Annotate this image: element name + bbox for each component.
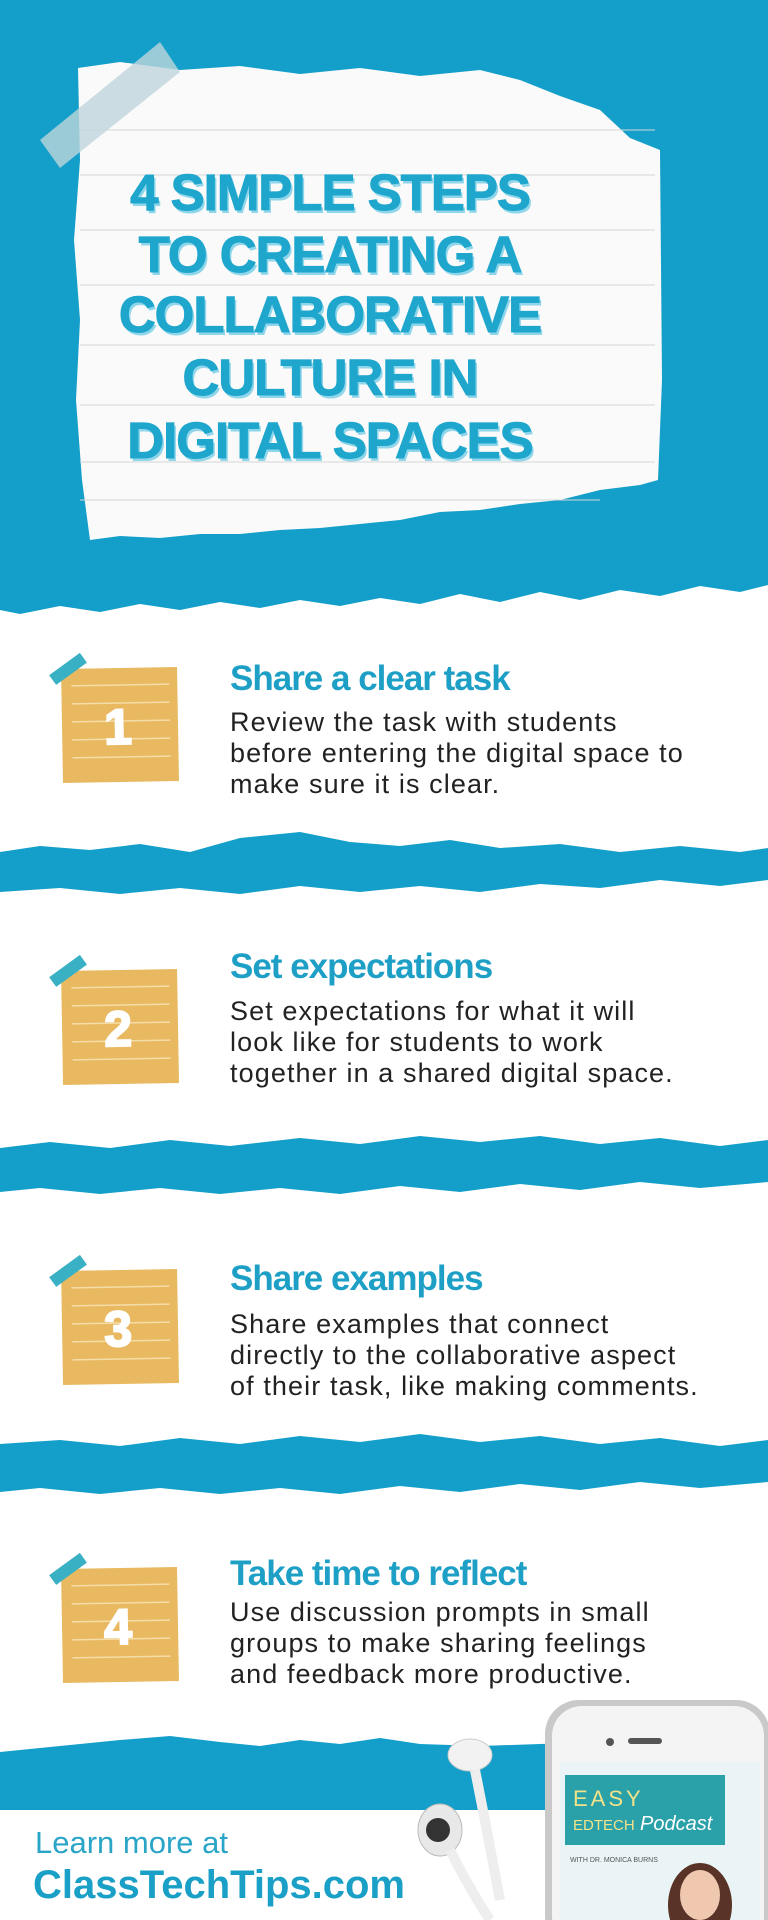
tape <box>40 42 180 168</box>
step 3 <box>49 1253 699 1401</box>
body 2 <box>230 996 674 1088</box>
step 4 <box>49 1551 650 1689</box>
body 4 <box>230 1597 650 1689</box>
heading 4: Take time to reflect <box>230 1554 528 1593</box>
note 4: 4 <box>104 1599 133 1655</box>
body 1: make sure it is clear. <box>230 769 500 799</box>
heading 1: Share a clear task <box>230 659 511 698</box>
title text: DIGITAL SPACES <box>129 415 535 472</box>
footer: learn more: ClassTechTips.com <box>33 1863 405 1907</box>
step 2 <box>49 947 674 1088</box>
heading 2: Set expectations <box>230 947 493 986</box>
strip 1 <box>0 832 768 894</box>
background: top blue torn <box>0 0 768 614</box>
title text: CULTURE IN <box>184 352 480 409</box>
body 3: directly to the collaborative aspect <box>230 1340 676 1370</box>
title text: TO CREATING A <box>139 226 522 283</box>
note 3: 3 <box>104 1301 132 1357</box>
body 3: of their task, like making comments. <box>230 1371 699 1401</box>
body 4: groups to make sharing feelings <box>230 1628 647 1658</box>
title text: 4 SIMPLE STEPS <box>130 164 530 221</box>
icon: phone with podcast: Podcast <box>640 1813 714 1835</box>
icon: phone with podcast: EDTECH <box>573 1817 635 1834</box>
title text: 4 SIMPLE STEPS <box>132 167 532 224</box>
body 4: and feedback more productive. <box>230 1659 633 1689</box>
note 3 <box>49 1253 179 1385</box>
icon: phone with podcast: WITH DR. MONICA BURNS <box>570 1857 658 1864</box>
note 2 <box>49 953 179 1085</box>
title text: DIGITAL SPACES <box>127 412 533 469</box>
step 1 <box>49 651 684 799</box>
strip 4 bottom blue <box>0 1736 768 1810</box>
strip 2 <box>0 1136 768 1194</box>
body 2: Set expectations for what it will <box>230 996 635 1026</box>
body 4: Use discussion prompts in small <box>230 1597 650 1627</box>
footer: learn more: Learn more at <box>35 1825 228 1860</box>
title text: TO CREATING A <box>141 229 524 286</box>
body 3 <box>230 1309 699 1401</box>
footer: learn more <box>33 1825 405 1907</box>
note 1 <box>49 651 179 783</box>
icon: earbuds <box>418 1739 500 1920</box>
heading 3: Share examples <box>230 1259 483 1298</box>
body 1 <box>230 707 684 799</box>
strip 3 <box>0 1434 768 1494</box>
title text: CULTURE IN <box>182 349 478 406</box>
body 2: together in a shared digital space. <box>230 1058 674 1088</box>
body 3: Share examples that connect <box>230 1309 609 1339</box>
title text: COLLABORATIVE <box>121 289 543 346</box>
body 1: before entering the digital space to <box>230 738 684 768</box>
title text <box>119 164 543 472</box>
note 1: 1 <box>104 699 132 755</box>
icon: phone with podcast: EASY <box>573 1786 644 1811</box>
note 2: 2 <box>104 1001 132 1057</box>
note 4 <box>49 1551 179 1683</box>
title text: COLLABORATIVE <box>119 286 541 343</box>
body 1: Review the task with students <box>230 707 618 737</box>
body 2: look like for students to work <box>230 1027 604 1057</box>
title paper <box>40 42 662 540</box>
icon: phone with podcast <box>545 1700 768 1920</box>
